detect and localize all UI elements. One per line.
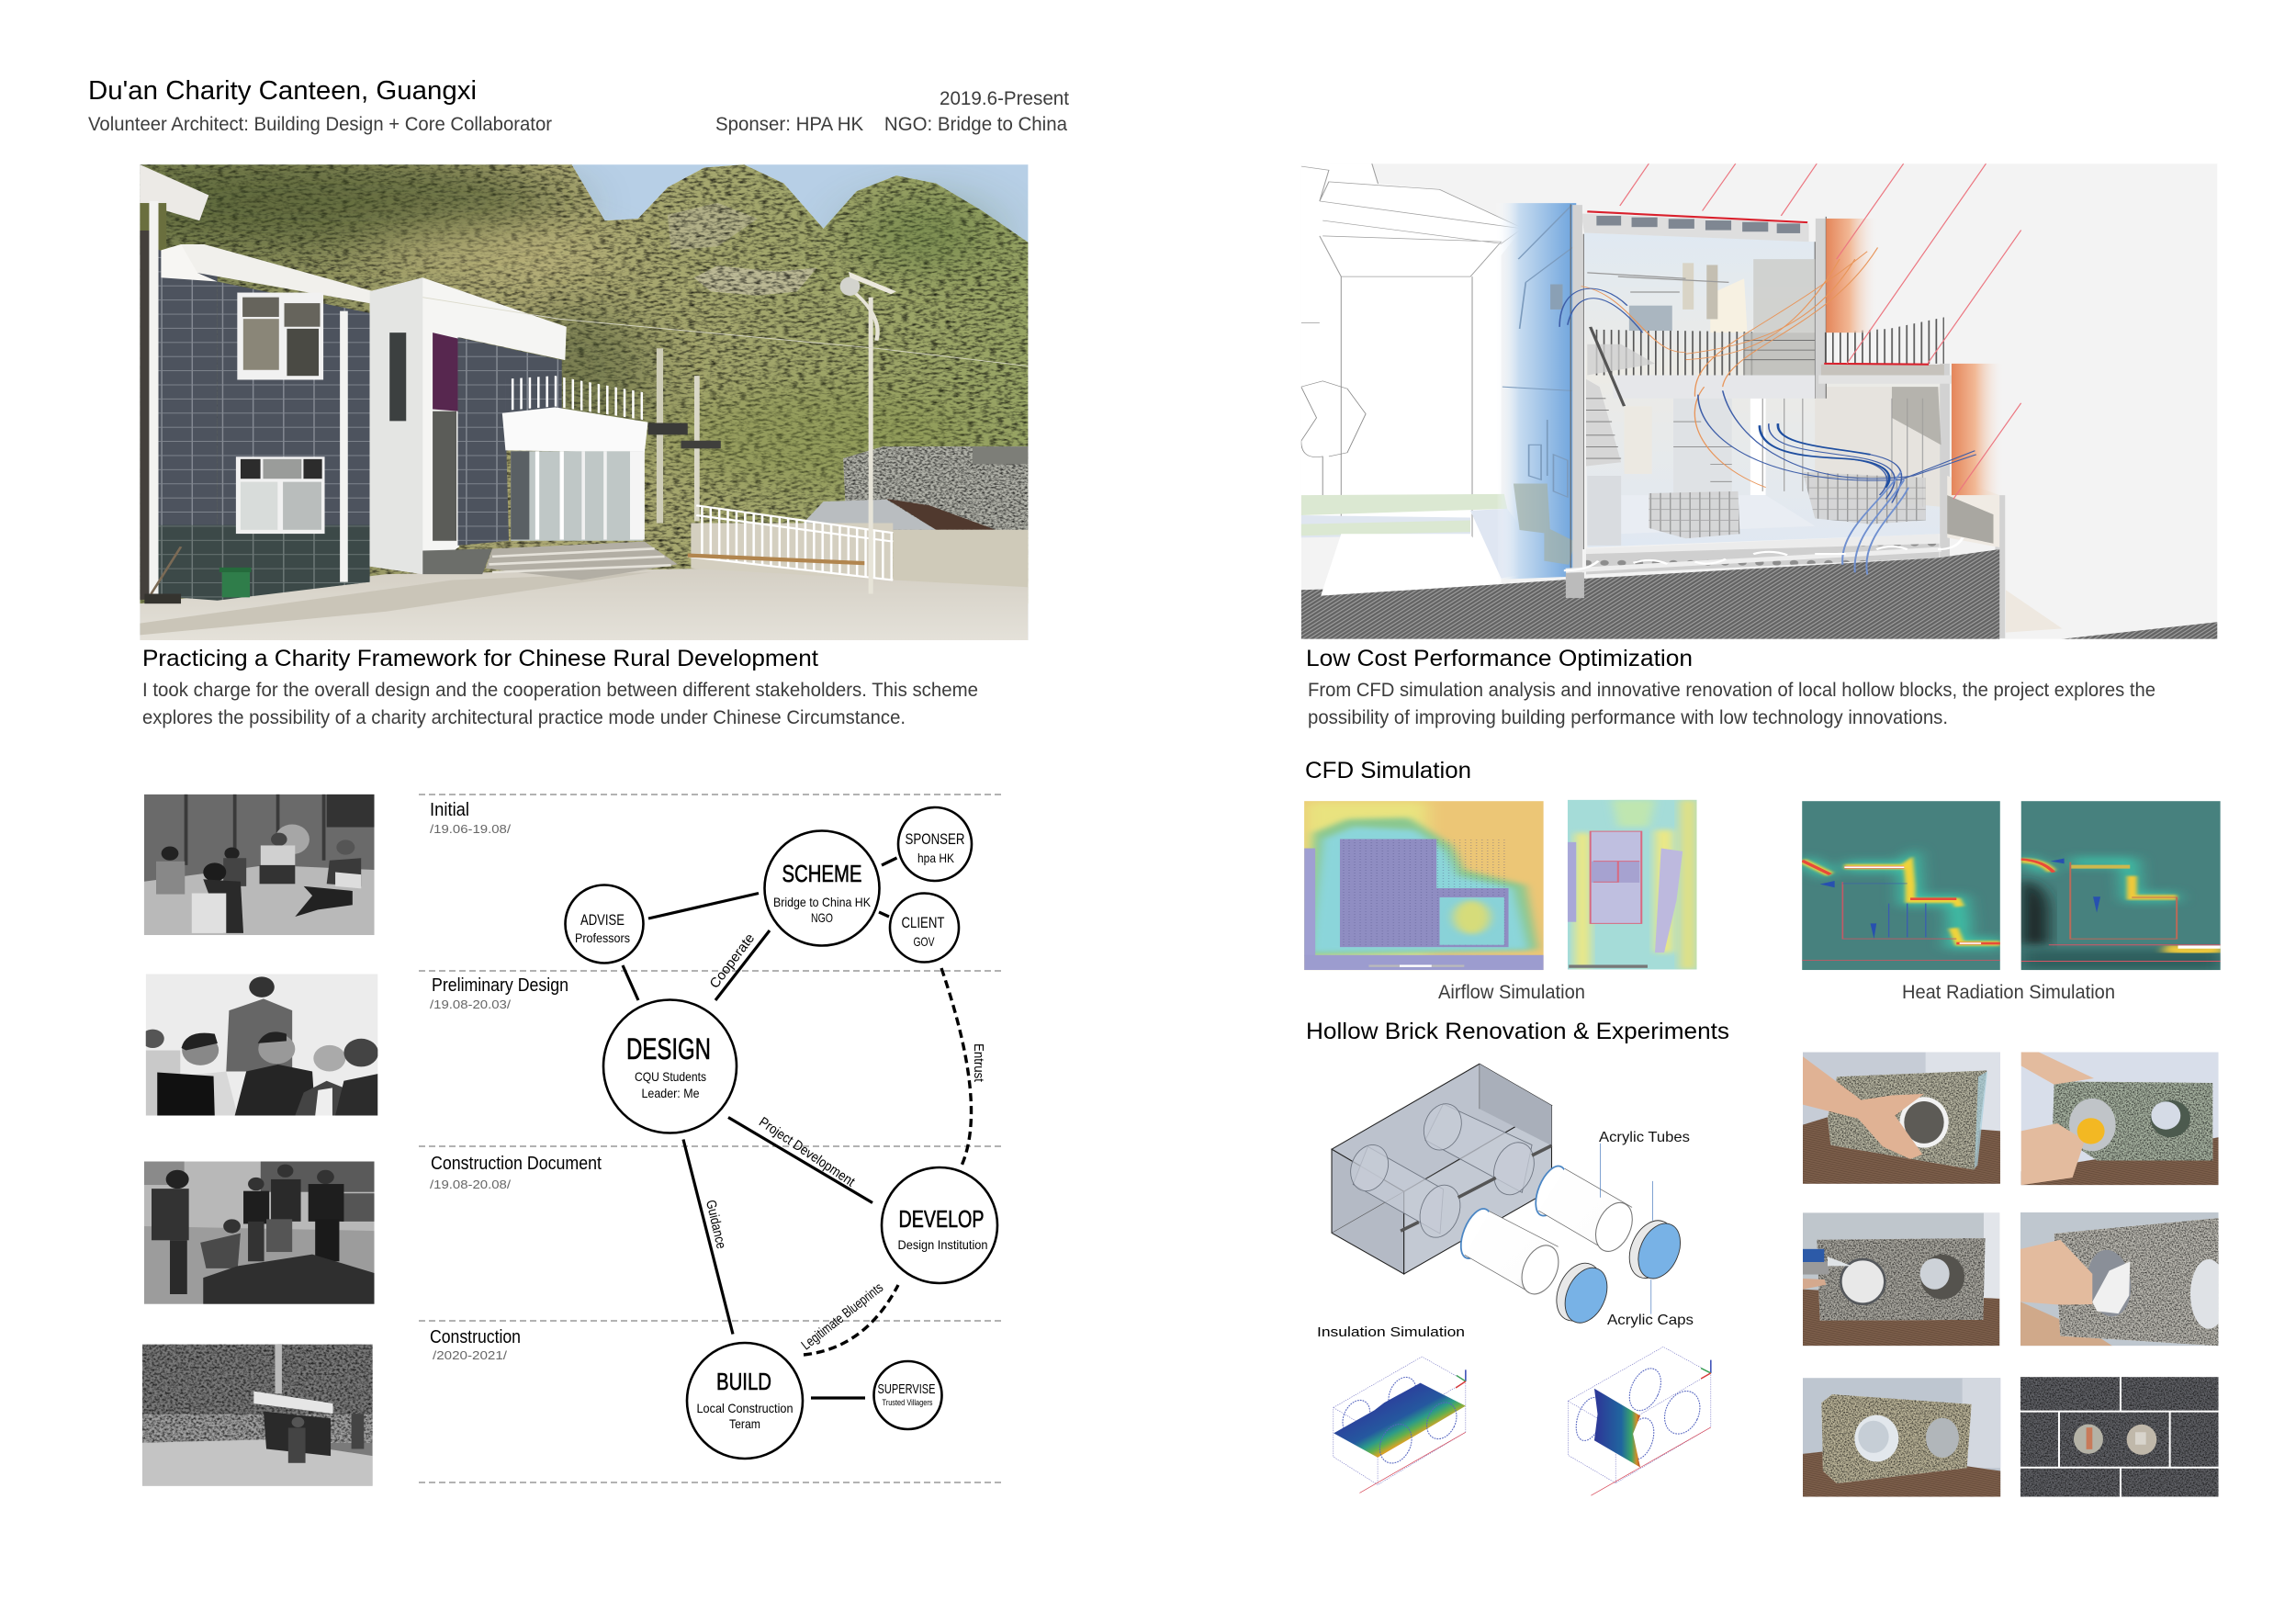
role line: Volunteer Architect: Building Design + Core Collaborator <box>88 114 552 135</box>
title: Du'an Charity Canteen, Guangxi <box>88 76 477 106</box>
roof slab with red insulated layer <box>1581 213 1809 242</box>
orange warm gradients <box>1826 219 1878 332</box>
node: design: Leader: Me <box>641 1086 700 1100</box>
header: project title and credits <box>88 76 1069 135</box>
node: sponsor: SPONSER <box>906 830 964 848</box>
photo: applying sealant <box>1803 1212 1999 1346</box>
acrylic caps label: Acrylic Caps <box>1607 1313 1694 1328</box>
white under-floor arrows <box>1564 537 1963 570</box>
stage: initial <box>430 800 511 836</box>
white entry volume <box>370 277 567 574</box>
photo: inserting acrylic tube <box>1803 1053 2000 1184</box>
hollow brick axonometric diagram <box>1332 1064 1711 1495</box>
heat radiation view two <box>2021 801 2221 970</box>
hillside <box>140 164 1028 603</box>
airflow section view <box>1568 800 1697 969</box>
insulation simulation one <box>1334 1357 1466 1493</box>
project date: 2019.6-Present <box>940 88 1069 109</box>
heat radiation caption: Heat Radiation Simulation <box>1902 982 2115 1003</box>
node: build: Local Construction <box>696 1401 793 1415</box>
node: supervise: Trusted Villagers <box>882 1398 933 1407</box>
photo: construction document site visit <box>144 1162 375 1304</box>
connector labels: Project Development <box>756 1114 858 1190</box>
connector lines <box>623 858 972 1398</box>
node: client: GOV <box>913 934 935 949</box>
node: client: CLIENT <box>902 914 944 931</box>
airflow simulation plots <box>1304 800 2221 970</box>
brick body <box>1332 1064 1551 1191</box>
CFD simulation heading: CFD Simulation <box>1305 758 1471 783</box>
node: develop: DEVELOP <box>898 1205 985 1233</box>
connector labels: Legitimate Blueprints <box>798 1280 886 1353</box>
garden wall and plants <box>1947 476 1999 547</box>
purple signboard <box>433 332 457 411</box>
stage: construction document <box>430 1154 602 1191</box>
stage: preliminary design: /19.08-20.03/ <box>430 997 511 1011</box>
node: scheme: SCHEME <box>782 860 861 887</box>
main building photograph <box>115 160 1028 640</box>
right background house <box>843 446 1028 531</box>
node: design: CQU Students <box>635 1069 706 1084</box>
acrylic tubes <box>1455 1162 1639 1300</box>
node: scheme: Bridge to China HK <box>773 895 872 909</box>
stage: construction <box>430 1327 521 1362</box>
structural walls <box>1578 205 2000 638</box>
photo: finished brick <box>1803 1378 2000 1497</box>
stage: construction document: Construction Document <box>431 1154 602 1174</box>
stage dividers <box>419 795 1004 1482</box>
balcony <box>505 376 643 420</box>
warm air flow <box>1581 248 1878 488</box>
stage: preliminary design <box>430 975 568 1011</box>
insulation simulation two <box>1568 1347 1711 1495</box>
experiment photographs <box>1803 1053 2227 1497</box>
left caption paragraph: explores the possibility of a charity architectural practice mode under Chinese Circumstance. <box>142 707 906 728</box>
stakeholder process diagram <box>419 795 1004 1482</box>
glazed entrance <box>511 451 643 541</box>
steps <box>486 542 678 580</box>
right caption paragraph: From CFD simulation analysis and innovative renovation of local hollow blocks, the project explores the <box>1308 680 2155 701</box>
brick bores <box>1345 1099 1541 1243</box>
green bin <box>222 569 250 597</box>
stage: construction: Construction <box>430 1327 521 1347</box>
node: sponsor <box>898 807 972 881</box>
left caption paragraph <box>142 680 978 728</box>
acrylic tubes label: Acrylic Tubes <box>1599 1130 1690 1145</box>
ramp railing <box>696 505 893 580</box>
lower window <box>236 456 325 534</box>
stage: initial: Initial <box>430 800 469 820</box>
sponsor and NGO: Sponser: HPA HK NGO: Bridge to China <box>715 114 1067 135</box>
interior rooms <box>1584 233 1941 547</box>
blue cool facade <box>1495 203 1576 580</box>
under-floor air cavity <box>1586 542 1940 574</box>
photo: fixing with yellow clamp <box>2021 1053 2219 1185</box>
interior fixtures <box>1613 376 1815 399</box>
connector labels: Entrust <box>971 1043 986 1083</box>
neighbouring house line drawing <box>1301 163 1503 584</box>
stage: preliminary design: Preliminary Design <box>432 975 568 996</box>
downpipes <box>149 201 159 598</box>
node: design <box>603 999 737 1133</box>
upper window <box>237 293 323 379</box>
insulation simulation label: Insulation Simulation <box>1317 1324 1465 1340</box>
team photographs by stage <box>141 795 378 1486</box>
solar radiation rays <box>1620 163 2021 499</box>
photo: peeling film <box>2020 1212 2227 1346</box>
terrace with railing <box>1821 317 1944 364</box>
stage: construction: /2020-2021/ <box>433 1348 507 1362</box>
leader lines <box>1600 1144 1653 1314</box>
right caption heading: Low Cost Performance Optimization <box>1306 646 1693 671</box>
node: build: Teram <box>729 1416 760 1431</box>
node: advise: Professors <box>575 930 630 945</box>
cool air flow <box>1559 288 1976 503</box>
node: design: DESIGN <box>626 1032 711 1065</box>
stage: initial: /19.06-19.08/ <box>430 822 511 836</box>
connector labels <box>703 930 986 1353</box>
node: advise <box>566 885 643 963</box>
node: sponsor: hpa HK <box>917 851 955 865</box>
hollow brick heading: Hollow Brick Renovation & Experiments <box>1306 1019 1729 1044</box>
ground <box>140 569 1028 640</box>
staircase <box>1586 379 1621 466</box>
connector labels: Cooperate <box>707 930 758 991</box>
stage: construction document: /19.08-20.08/ <box>430 1178 511 1191</box>
node: develop <box>882 1167 997 1283</box>
node: build <box>687 1343 803 1459</box>
left caption heading: Practicing a Charity Framework for Chinese Rural Development <box>142 646 818 671</box>
acrylic caps <box>1548 1213 1688 1329</box>
photo: preliminary design discussion <box>141 974 378 1115</box>
old house eaves at far left <box>140 164 208 220</box>
street lamp <box>869 298 873 594</box>
node: supervise: SUPERVISE <box>878 1381 935 1397</box>
right caption paragraph: possibility of improving building performance with low technology innovations. <box>1308 707 1948 728</box>
left caption paragraph: I took charge for the overall design and the cooperation between different stakeholders. This scheme <box>142 680 978 701</box>
utility poles <box>657 348 663 524</box>
node: scheme: NGO <box>811 910 833 925</box>
node: scheme <box>764 830 880 946</box>
photo: construction drilling rig <box>142 1345 373 1486</box>
ground hatch <box>1301 549 1999 639</box>
dining furniture <box>1649 491 1739 538</box>
airflow plan view <box>1304 801 1544 970</box>
dark brick volume <box>158 250 218 525</box>
node: develop: Design Institution <box>898 1237 988 1252</box>
heat radiation view one <box>1802 801 2000 970</box>
node: advise: ADVISE <box>580 911 625 929</box>
node: build: BUILD <box>716 1368 771 1395</box>
right caption paragraph <box>1308 680 2155 728</box>
node: client <box>890 893 959 963</box>
connector labels: Guidance <box>703 1199 729 1250</box>
photo: installed wall <box>2020 1377 2219 1497</box>
photo: initial stage meeting <box>144 795 375 935</box>
airflow simulation caption: Airflow Simulation <box>1438 982 1585 1003</box>
node: supervise <box>874 1361 942 1429</box>
section drawing with airflow and solar radiation <box>1301 163 2217 639</box>
